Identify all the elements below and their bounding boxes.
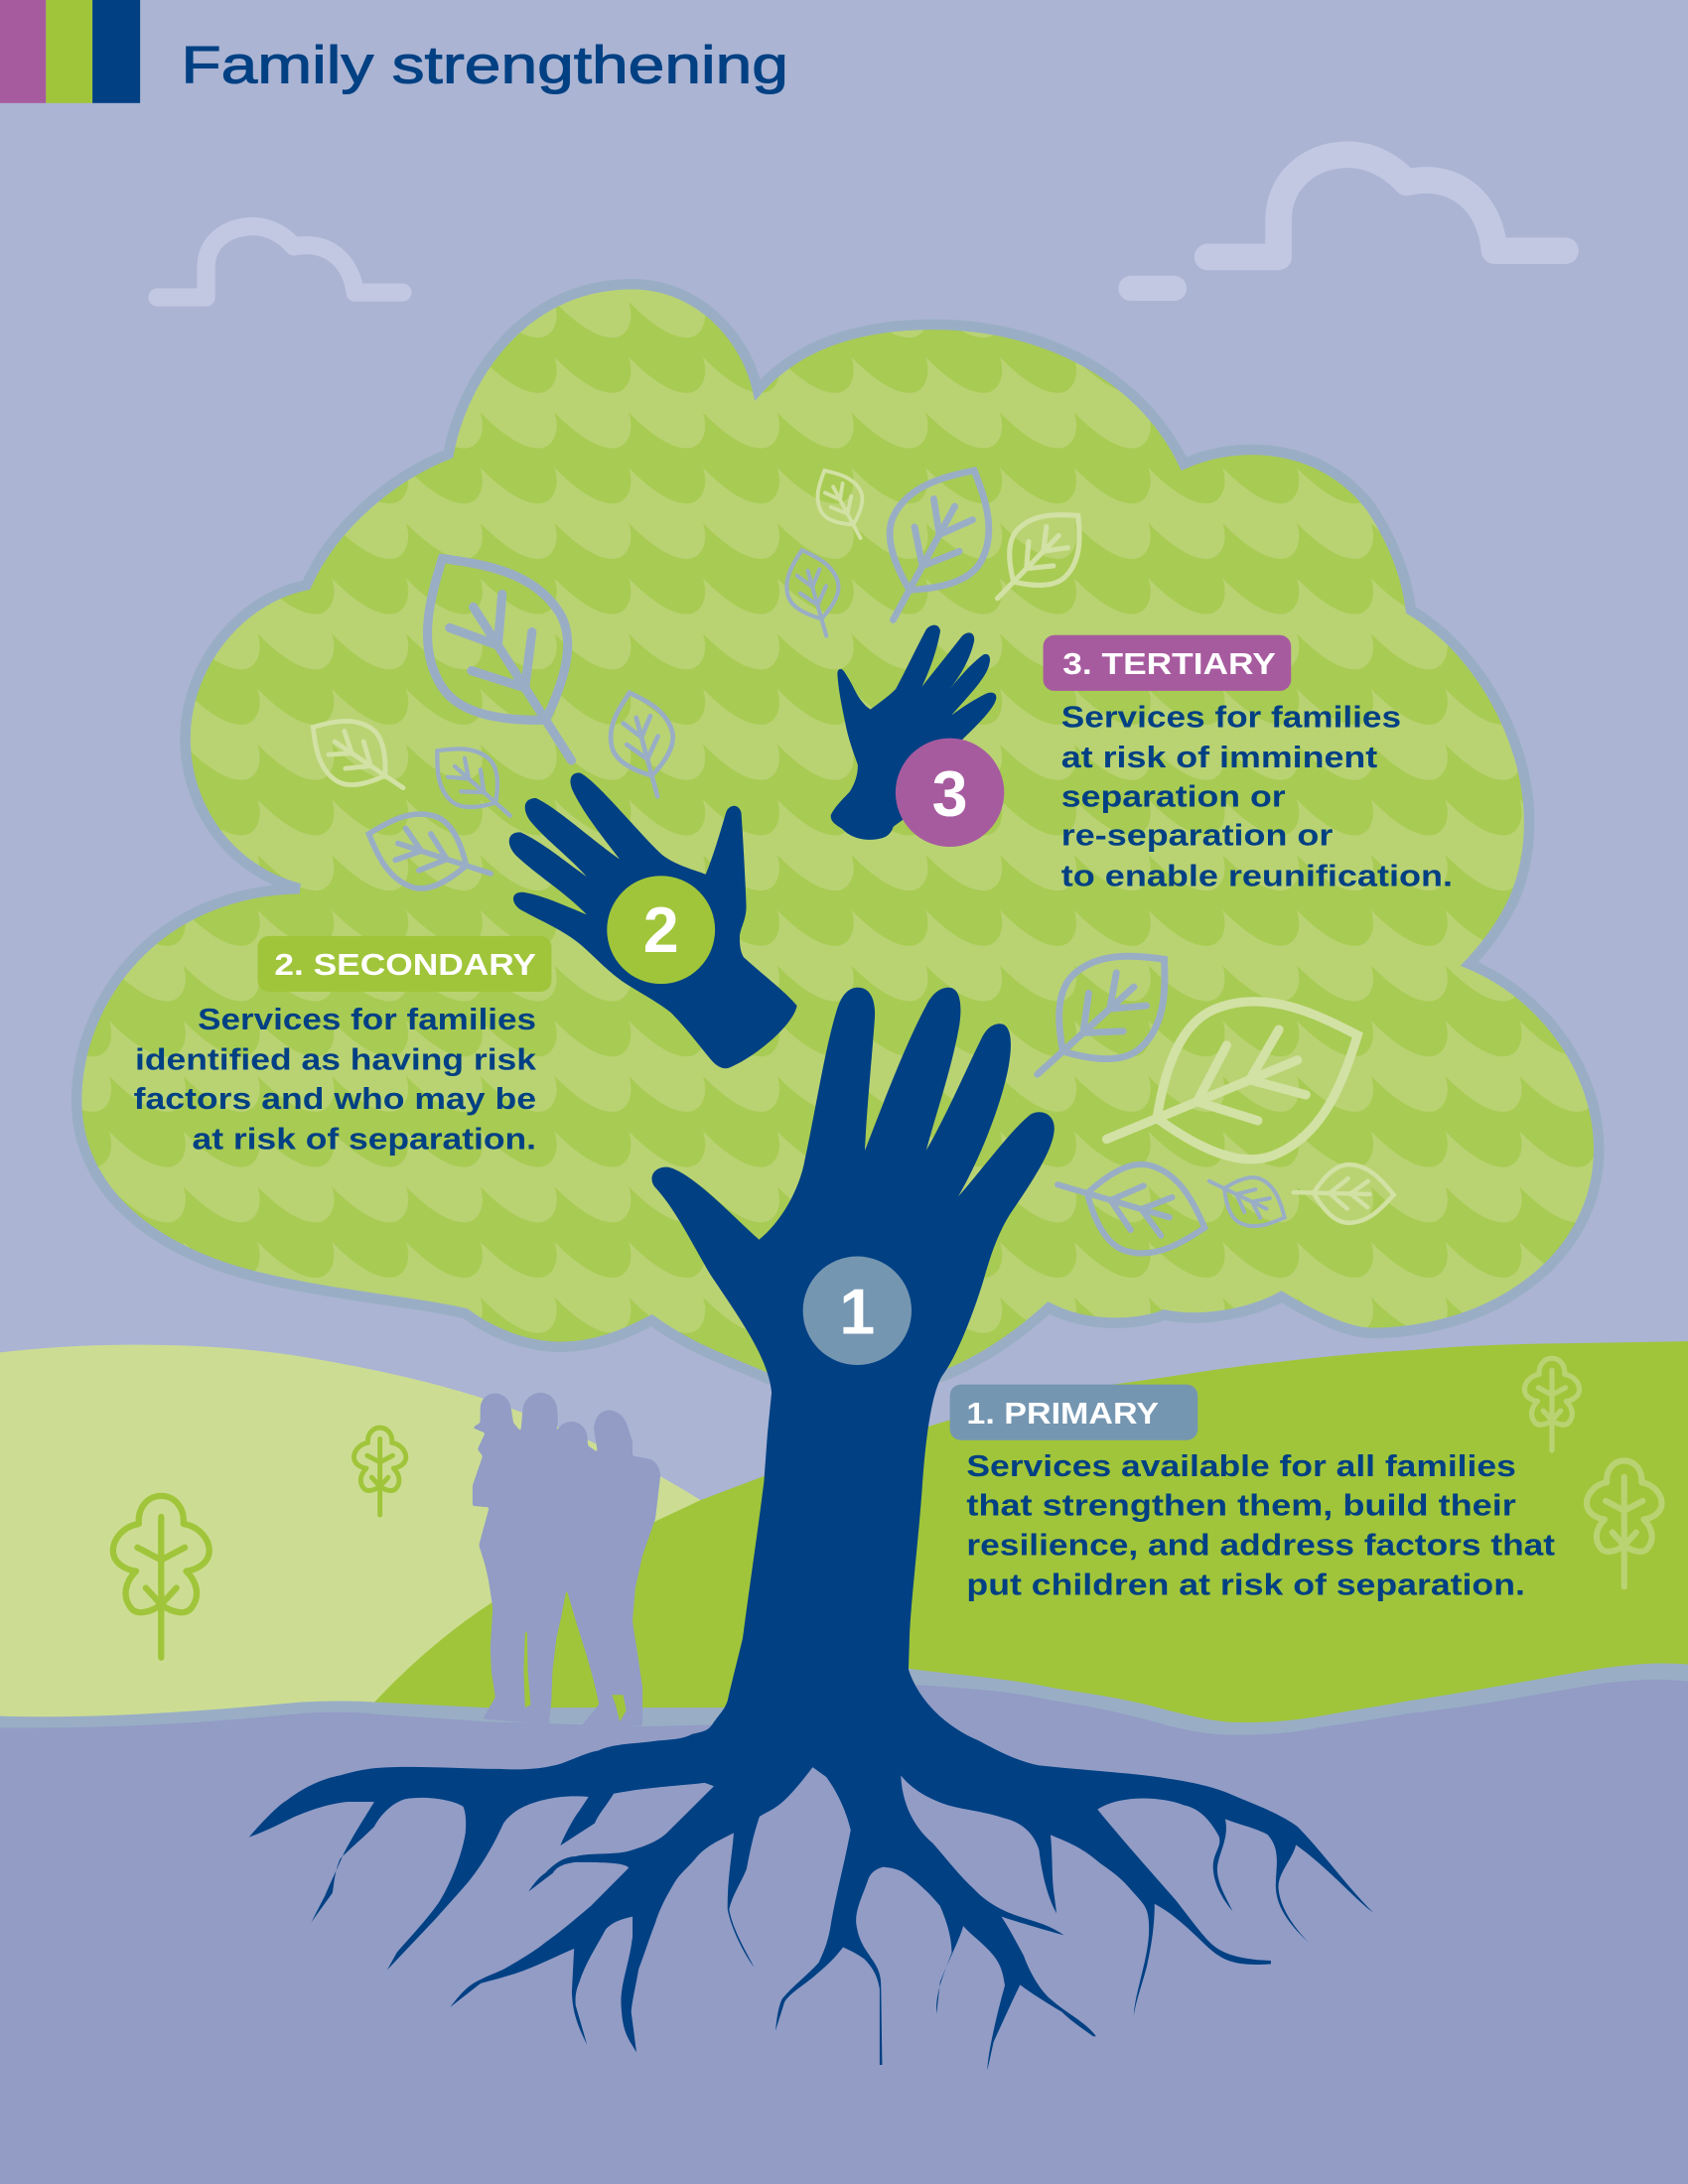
leaf 8: blue [777,543,851,643]
leaf 1: large blue [384,521,630,798]
number badge 3: 3 [932,758,968,830]
text: secondary description [134,1002,537,1157]
hand 2 [509,773,797,1068]
text: secondary description: at risk of separation. [193,1122,536,1157]
ground [0,1680,1688,2184]
hill: light left [0,1345,779,1741]
hand 3 [831,625,996,840]
number badge 2 [607,876,715,984]
leaf 12: blue [1046,1142,1217,1271]
label: 2. secondary [257,936,551,992]
label: 3. tertiary [1044,635,1291,691]
text: tertiary description: separation or [1061,778,1286,813]
tree icon: small on green hill [1524,1358,1580,1450]
leaf 6: pale [805,460,880,549]
number badge 3 [896,739,1004,847]
title: Family strengthening [181,36,788,94]
leaf 4: blue [357,798,502,909]
number badge 1: 1 [839,1276,875,1347]
leaf 13: blue [1198,1160,1295,1239]
text: primary description: put children at risk of separation. [966,1568,1525,1602]
trunk, hand 1 and roots [249,988,1373,2070]
tree icon: small on light hill [353,1428,406,1515]
number badge 2: 2 [643,894,679,966]
header colour bars [0,0,140,103]
text: primary description: Services available for all families [966,1448,1516,1483]
leaf 7: blue [850,447,1018,643]
text: secondary description: Services for families [198,1002,536,1036]
tree icon: large on light hill [113,1496,210,1658]
leaf 5: blue [600,685,687,804]
leaf 11: large pale [1076,962,1388,1212]
number badge 1 [803,1257,912,1365]
cloud: left [157,226,402,298]
text: tertiary description: Services for families [1061,699,1401,734]
label: 1. primary: 1. PRIMARY [966,1396,1159,1431]
text: tertiary description: re-separation or [1061,818,1333,853]
cloud: right [1131,155,1566,288]
label: 1. primary [950,1385,1197,1440]
leaf 14: pale [1293,1163,1394,1224]
leaf 3: blue [418,730,529,837]
text: secondary description: factors and who may be [134,1081,536,1116]
tree icon: large on green hill [1587,1460,1662,1586]
canopy scallop shape [76,284,1599,1393]
tree canopy [76,284,1599,1393]
ground horizon band [0,1664,1688,2184]
text: tertiary description: at risk of imminent [1061,740,1377,774]
text: tertiary description: to enable reunification. [1061,858,1453,892]
text: primary description: that strengthen them, build their [966,1488,1516,1523]
text: primary description [966,1448,1555,1602]
text: primary description: resilience, and address factors that [966,1528,1555,1563]
hill: green right [373,1341,1688,1811]
leaf 9: pale [973,492,1102,621]
label: 3. tertiary: 3. TERTIARY [1062,646,1276,681]
text: secondary description: identified as having risk [135,1042,537,1077]
label: 2. secondary: 2. SECONDARY [274,947,536,982]
leaf 10: blue [1004,922,1197,1111]
family silhouette [473,1393,660,1725]
text: tertiary description [1061,699,1453,892]
leaf 2: pale [296,701,421,814]
